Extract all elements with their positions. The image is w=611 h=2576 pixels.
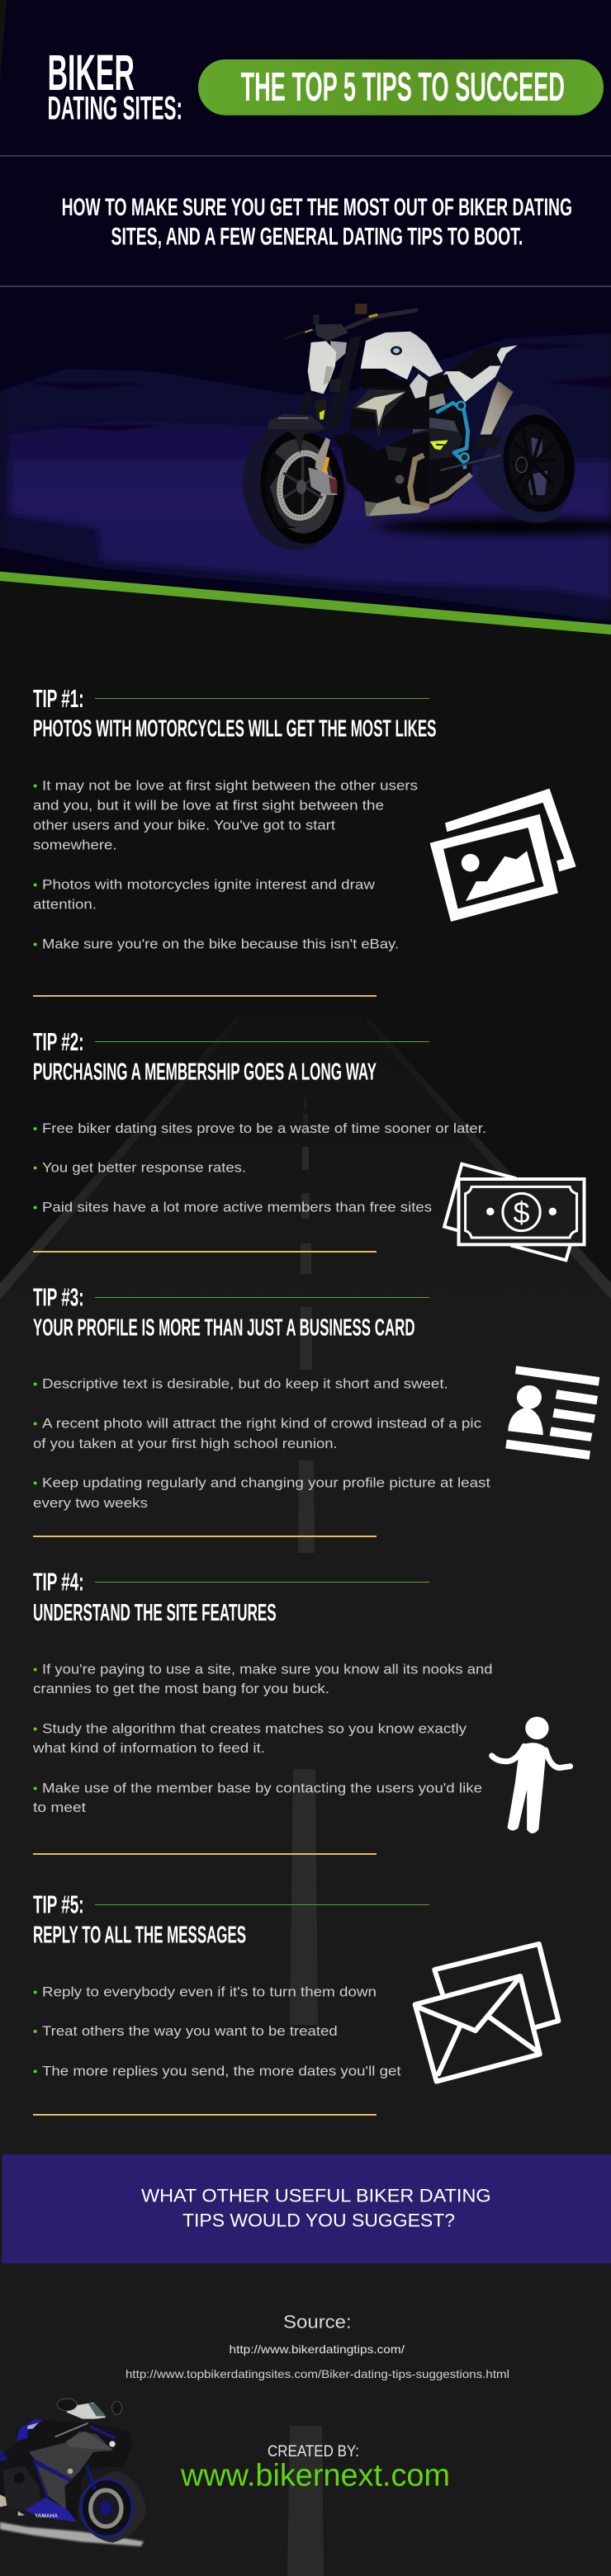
credit block: CREATED BY: [268,2443,359,2460]
tip 3 body text: Keep updating regularly and changing your profile picture at least [42,1475,490,1491]
tip 3 body text: every two weeks [33,1495,148,1511]
source list: http://www.bikerdatingtips.com/ [230,2342,405,2356]
tip 1 body text: other users and your bike. You've got to start [33,817,335,833]
green diagonal stripe [0,572,611,635]
tip 5 body text: • [33,2025,37,2039]
middle engine block [333,432,429,531]
tip 2 body text: • [33,1122,37,1136]
tip 2 panel [33,1027,585,1260]
tip 2 body text [33,1121,486,1215]
question banner [2,2154,611,2263]
tip 4 body text: • [33,1782,37,1795]
background: hero purple wash [0,333,611,621]
tip 4 body text: • [33,1722,37,1736]
tip 3 body text: • [33,1418,37,1432]
tip 3 body text: A recent photo will attract the right kind of crowd instead of a pic [42,1416,482,1432]
icon: banknotes [444,1164,585,1260]
intro text [62,194,572,251]
background: header navy [0,0,611,644]
background: lower dark asphalt [0,578,611,2576]
tip 3 body text: • [33,1477,37,1491]
tip 2 heading: PURCHASING A MEMBERSHIP GOES A LONG WAY [33,1059,377,1086]
tip 1 body text: somewhere. [33,837,117,852]
tip 2 body text: • [33,1162,37,1176]
rear half of bike [413,345,580,522]
fuel tank [361,332,443,399]
tip 4 body text: Make use of the member base by contacting the users you'd like [42,1781,482,1795]
tip 3 label: TIP #3: [33,1283,84,1312]
tip 1 label: TIP #1: [33,684,84,713]
tip 3 panel [33,1283,599,1537]
background: road [0,1016,611,2576]
illustration: blue sport motorcycle [0,2399,146,2546]
tip 3 body text [33,1376,490,1511]
tip 2 body text: Paid sites have a lot more active members than free sites [42,1200,432,1215]
question banner: TIPS WOULD YOU SUGGEST? [182,2210,455,2230]
tip 5 body text: • [33,2064,37,2079]
tip 3 body text: of you taken at your first high school reunion. [33,1436,338,1451]
icon: envelopes [415,1944,558,2082]
tip 4 body text: • [33,1663,37,1677]
tip 4 label: TIP #4: [33,1568,84,1597]
tip 2 body text: • [33,1201,37,1215]
title: biker dating sites: DATING SITES: [48,91,182,127]
tip 5 heading: REPLY TO ALL THE MESSAGES [33,1922,246,1948]
credit block: www.bikernext.com [180,2459,450,2493]
tip 4 body text: to meet [33,1800,86,1815]
credit block [180,2443,450,2493]
tip 5 body text: • [33,1985,37,2000]
source list: http://www.topbikerdatingsites.com/Biker-dating-tips-suggestions.html [126,2367,509,2380]
illustration: white naked motorcycle [242,304,611,550]
source list: Source: [283,2312,352,2333]
source list [126,2312,509,2380]
corner sliver [0,0,7,83]
tip 1 body text: and you, but it will be love at first sight between the [33,797,384,813]
title: biker dating sites [48,45,182,127]
icon: profile card [506,1366,599,1460]
icon: banknotes: $ [513,1196,530,1229]
tip 1 body text: Photos with motorcycles ignite interest and draw [42,876,376,893]
tip 5 label: TIP #5: [33,1890,84,1919]
bike logo text: YAMAHA [35,2514,59,2519]
tip 1 body text: attention. [33,896,97,912]
tip 5 body text: The more replies you send, the more dates you'll get [42,2063,401,2079]
tip 5 panel [33,1890,558,2116]
tip 4 body text: what kind of information to feed it. [32,1740,265,1756]
question banner: WHAT OTHER USEFUL BIKER DATING [141,2185,491,2206]
tip 2 label: TIP #2: [33,1027,84,1056]
tip 4 panel [32,1568,571,1855]
tip 2 body text: Free biker dating sites prove to be a waste of time sooner or later. [42,1121,486,1136]
tip 4 body text [32,1661,492,1815]
tip 4 heading: UNDERSTAND THE SITE FEATURES [33,1600,277,1626]
icon: photos [430,789,576,922]
icon: shrugging person [492,1717,571,1833]
tip 5 body text: Reply to everybody even if it's to turn them down [42,1984,377,2000]
tip 1 body text: Make sure you're on the bike because this isn't eBay. [42,936,399,951]
tip 3 body text: • [33,1378,37,1392]
tip 4 body text: If you're paying to use a site, make sure you know all its nooks and [42,1661,492,1677]
tip 2 body text: You get better response rates. [42,1160,246,1176]
front and tank [268,304,429,440]
tip 4 body text: crannies to get the most bang for you buck. [33,1681,329,1696]
tip 1 body text: It may not be love at first sight between the other users [42,777,418,794]
tip 1 body text [33,777,418,951]
tip 5 body text [33,1984,401,2079]
tip 4 body text: Study the algorithm that creates matches so you know exactly [42,1720,467,1736]
tip 1 body text: • [33,779,37,794]
tip 1 body text: • [33,878,37,893]
title: biker dating sites: BIKER [48,45,135,101]
tip 1 body text: • [33,937,37,951]
front wheel [242,418,351,550]
tip 3 body text: Descriptive text is desirable, but do keep it short and sweet. [42,1376,448,1392]
tip 1 panel [33,684,576,997]
tip 5 body text: Treat others the way you want to be treated [42,2023,338,2039]
